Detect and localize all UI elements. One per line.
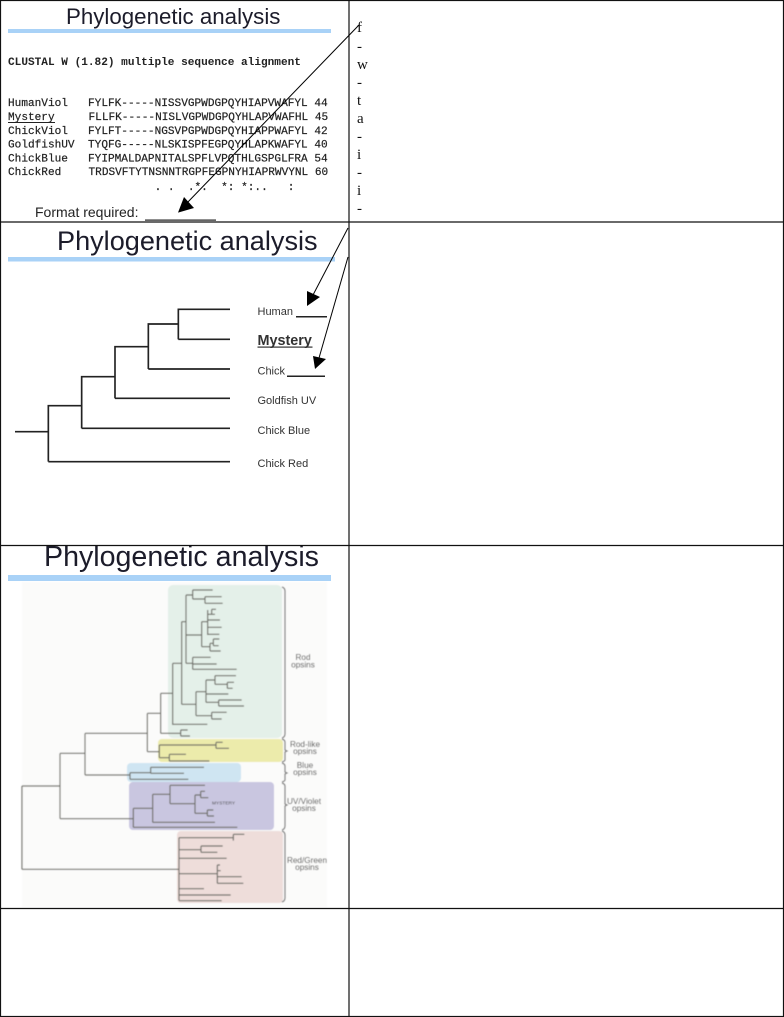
species labels: Mystery: [258, 333, 312, 349]
vertical letters column: t: [357, 93, 362, 109]
arrow: to format blank: [178, 25, 359, 213]
label: UV/violet opsins: opsins: [292, 804, 316, 813]
vertical letters column: w: [357, 57, 368, 73]
region: rod opsins: [168, 585, 282, 738]
vertical letters column: -: [357, 165, 362, 181]
phylogenetic tree: [15, 309, 230, 462]
label: mystery: MYSTERY: [212, 800, 236, 806]
label: rod opsins: opsins: [291, 660, 315, 670]
vertical letters column: -: [357, 129, 362, 145]
label: rod opsins: Rod: [295, 653, 311, 662]
sequence alignment rows: Mystery: [8, 112, 55, 124]
label: rod-like opsins: Rod-like: [290, 740, 320, 749]
branches: rod and rod-like: [147, 590, 244, 761]
species labels: Chick Red: [258, 458, 308, 470]
vertical letters column: a: [357, 111, 364, 127]
label: UV/violet opsins: UV/Violet: [287, 797, 322, 806]
region: rod-like opsins: [158, 739, 283, 762]
species labels: Goldfish UV: [258, 395, 317, 407]
species labels: Chick Blue: [258, 425, 310, 437]
species labels: Chick: [258, 366, 286, 378]
branches: root, blue, violet and red: [22, 733, 244, 901]
heading rule: simple tree: [8, 257, 335, 262]
sequence alignment rows: [8, 98, 328, 194]
label: blue opsins: Blue: [297, 761, 314, 770]
label: red/green opsins: Red/Green: [287, 856, 327, 865]
region: red/green opsins: [177, 831, 283, 903]
heading rule: opsin tree: [8, 575, 331, 581]
heading: opsin tree: Phylogenetic analysis: [44, 541, 319, 573]
sequence alignment rows: FYIPMALDAPNITALSPFLVPQTHLGSPGLFRA 54: [88, 154, 328, 166]
label: red/green opsins: opsins: [295, 863, 319, 872]
format required prompt: Format required:: [35, 204, 138, 220]
opsin tree figure: [22, 582, 327, 907]
sequence alignment rows: ChickBlue: [8, 154, 68, 166]
label: blue opsins: opsins: [293, 768, 317, 777]
sequence alignment rows: . . .*. *: *:.. :: [88, 182, 294, 194]
species labels: Human: [258, 306, 293, 318]
sequence alignment rows: FYLFK-----NISSVGPWDGPQYHIAPVWAFYL 44: [88, 98, 328, 110]
vertical letters column: i: [357, 147, 361, 163]
sequence alignment rows: GoldfishUV: [8, 140, 75, 152]
sequence alignment rows: TRDSVFTYTNSNNTRGPFEGPNYHIAPRWVYNL 60: [88, 167, 328, 179]
vertical letters column: -: [357, 75, 362, 91]
sequence alignment rows: TYQFG-----NLSKISPFEGPQYHLAPKWAFYL 40: [88, 140, 328, 152]
arrow: to chick blank: [313, 257, 348, 369]
species labels: [258, 306, 327, 470]
label: rod-like opsins: opsins: [293, 747, 317, 756]
heading rule: alignment: [8, 29, 331, 33]
region: UV/violet opsins: [129, 782, 274, 830]
sequence alignment rows: ChickViol: [8, 126, 68, 138]
braces: [282, 587, 287, 902]
region: blue opsins: [127, 763, 241, 782]
arrow: to human blank: [307, 228, 348, 306]
sequence alignment rows: ChickRed: [8, 167, 61, 179]
alignment header: CLUSTAL W (1.82) multiple sequence alignment: [8, 57, 301, 69]
sequence alignment rows: HumanViol: [8, 98, 68, 110]
vertical letters column: i: [357, 183, 361, 199]
heading: simple tree: Phylogenetic analysis: [57, 225, 318, 256]
sequence alignment rows: FLLFK-----NISLVGPWDGPQYHLAPVWAFHL 45: [88, 112, 328, 124]
vertical letters column: -: [357, 39, 362, 55]
vertical letters column: f: [357, 20, 362, 36]
panel: alignment slide: [8, 4, 331, 221]
panel: opsin tree slide: [8, 541, 331, 907]
vertical letters column: -: [357, 201, 362, 217]
heading: alignment: Phylogenetic analysis: [66, 4, 280, 29]
sequence alignment rows: FYLFT-----NGSVPGPWDGPQYHIAPPWAFYL 42: [88, 126, 328, 138]
vertical letters column: [357, 20, 368, 217]
panel: simple tree slide: [8, 225, 335, 470]
